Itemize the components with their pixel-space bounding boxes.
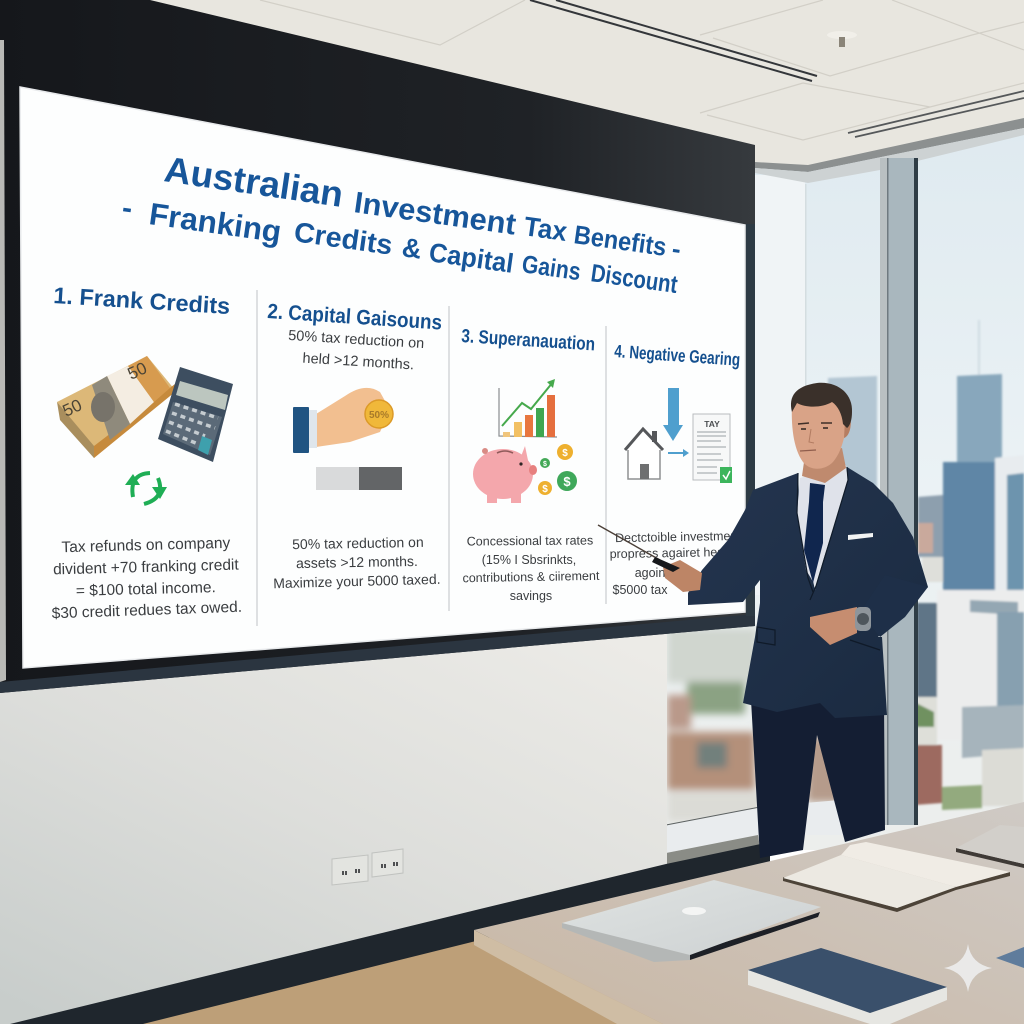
body text 1: divident +70 franking credit [53, 557, 240, 578]
column 1: Frank Credits [51, 282, 242, 622]
slide title: Franking [147, 196, 284, 249]
icon: coins [538, 444, 577, 495]
floor [130, 860, 780, 1024]
icon: tax document [693, 414, 732, 483]
body text 1: = $100 total income. [76, 579, 216, 600]
document at right edge [956, 825, 1024, 868]
body text 3: (15% I Sbsrinkts, [482, 553, 576, 567]
column 4: Negative Gearing [610, 341, 741, 597]
slide title: - [120, 191, 135, 225]
subheading: 50% tax reduction on [288, 328, 425, 352]
slide [20, 87, 745, 668]
icon: calculator [158, 367, 233, 462]
presenter [598, 383, 928, 858]
subheading [288, 328, 425, 373]
jacket [688, 467, 928, 718]
column 3: Superannuation [461, 326, 600, 603]
slide title: Credits [292, 216, 395, 261]
gap under right arm [880, 575, 886, 632]
icon: green cycle arrows [125, 473, 167, 504]
body text 4: Dectctoible investment [615, 529, 741, 545]
icon: split bar [316, 467, 402, 490]
sparkle mark [944, 944, 992, 992]
slide title: Benefits [572, 219, 668, 262]
wall sockets [332, 849, 403, 885]
body text 1: $30 credit redues tax owed. [51, 599, 242, 622]
heading 1: 1. Frank Credits [53, 282, 231, 319]
lapel lines [757, 467, 880, 650]
conference table [474, 802, 1024, 1024]
slide title: & [400, 232, 424, 265]
tie [804, 483, 825, 583]
slide title: Investment [352, 186, 518, 242]
body text 3: Concessional tax rates [467, 533, 593, 549]
ceiling vent left [530, 0, 817, 81]
slide title: Gains [520, 250, 582, 286]
body text 2: 50% tax reduction on [292, 534, 424, 552]
body text 4: propress agairet hesms [610, 545, 740, 561]
shirt [797, 465, 848, 585]
body text 2: assets >12 months. [296, 553, 418, 571]
forearm highlight [860, 575, 928, 637]
icon: blue arrow [663, 388, 689, 457]
icon: hand with coin [293, 388, 393, 453]
icon: banknote bundle [57, 356, 175, 458]
open notebook [783, 842, 1010, 912]
body text 4: $5000 tax [613, 583, 668, 597]
icon: hand with coin: 50% [369, 410, 389, 421]
heading 2: 2. Capital Gaisouns [267, 300, 443, 335]
remote [652, 557, 680, 572]
body text 3: savings [510, 589, 552, 603]
window sill [666, 800, 880, 866]
tablet at right edge [996, 947, 1024, 968]
projection screen housing [0, 0, 755, 693]
icon: coins: $ [563, 474, 571, 489]
icon: banknote bundle: 50 [125, 358, 150, 384]
trousers [751, 700, 885, 858]
icon: tax document: TAY [704, 419, 720, 429]
slide title: Australian [162, 148, 346, 215]
navy book [748, 948, 947, 1024]
body text 3 [462, 533, 600, 603]
icon: growth chart [499, 379, 557, 437]
pointing hand [663, 560, 702, 592]
laptop [562, 880, 821, 962]
smoke detector [827, 31, 857, 47]
icon: house [625, 429, 663, 479]
body text 1: Tax refunds on company [61, 535, 231, 556]
ceiling vent right [848, 91, 1024, 137]
icon: coins: $ [543, 461, 547, 468]
wall [0, 632, 667, 1024]
body text 3: contributions & ciirement [462, 569, 600, 585]
slide title: Discount [589, 259, 680, 299]
pocket square [848, 533, 873, 540]
icon: coins: $ [542, 484, 548, 495]
window: city view [650, 130, 1024, 850]
clasped hand and watch [810, 607, 871, 645]
window frames and column [755, 118, 1024, 825]
body text 4: agoin [635, 566, 665, 580]
heading 3: 3. Superanauation [461, 326, 596, 355]
slide title [120, 148, 683, 299]
icon: piggy bank [473, 446, 537, 503]
body text 2: Maximize your 5000 taxed. [273, 571, 441, 591]
body text 4 [610, 529, 741, 597]
slide title: - [670, 233, 683, 264]
slide title: Capital [427, 237, 516, 279]
presenter's pointer [598, 525, 660, 560]
icon: coins: $ [562, 448, 568, 459]
column 2: Capital Gains [267, 300, 443, 591]
body text 2 [273, 534, 441, 591]
icon: banknote bundle: 50 [60, 395, 85, 421]
body text 1 [51, 535, 242, 622]
neck and head [791, 383, 852, 483]
ceiling [0, 0, 1024, 200]
subheading: held >12 months. [302, 351, 414, 373]
dividers [257, 290, 606, 626]
baseboard [10, 842, 770, 1024]
slide title: Tax [522, 211, 569, 247]
heading 4: 4. Negative Gearing [614, 341, 741, 370]
